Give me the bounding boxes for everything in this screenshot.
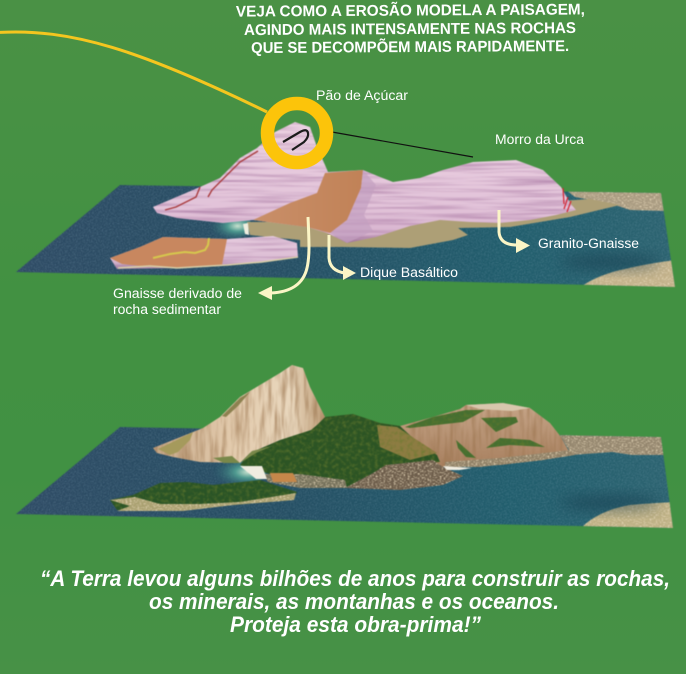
closing quote: [40, 566, 670, 637]
left shoulder vegetation: [158, 432, 193, 455]
small island: gneiss and granite: [110, 236, 298, 269]
shaded slope next to the band: [330, 170, 376, 243]
far shore, upper right: [204, 190, 680, 290]
shallow water by the beach: [218, 462, 266, 483]
small beach, Urca: [443, 466, 472, 470]
rock labels: Pão de Açúcar: [316, 88, 409, 103]
rock labels: rocha sedimentar: [113, 302, 222, 317]
yellow callout curve: [0, 32, 267, 112]
main mountain mass: [153, 122, 576, 243]
title: [236, 0, 585, 57]
rock labels: Granito-Gnaisse: [538, 236, 639, 251]
orange gneiss band: [253, 170, 363, 233]
near shore, lower right: [582, 502, 680, 530]
basalt trace yellow line: [153, 238, 209, 258]
arrow: gneiss: [258, 217, 309, 300]
arrow: basalt dike: [329, 235, 356, 280]
title: QUE SE DECOMPÕEM MAIS RAPIDAMENTE.: [251, 37, 569, 57]
title: AGINDO MAIS INTENSAMENTE NAS ROCHAS: [244, 20, 576, 39]
waterfront buildings: [263, 474, 347, 488]
town strip: [345, 460, 463, 490]
dark water shadow by the near shore: [560, 496, 660, 510]
beach strip: [243, 223, 249, 235]
small island: [110, 480, 297, 510]
shallow water near the beach: [214, 220, 250, 238]
green central hill: [240, 414, 440, 487]
water map plane: [16, 427, 673, 528]
water map plane: [16, 185, 675, 287]
closing quote: Proteja esta obra-prima!”: [230, 612, 481, 637]
realistic terrain panel: [16, 365, 680, 530]
near shore, lower right: [584, 260, 676, 288]
black contact line: [332, 132, 473, 157]
red dikes on the right end: [563, 188, 571, 212]
title: VEJA COMO A EROSÃO MODELA A PAISAGEM,: [236, 0, 585, 21]
ridge shading: [222, 392, 250, 417]
yellow ring highlight: [268, 104, 326, 162]
sports field: [270, 473, 297, 482]
rock labels: Morro da Urca: [495, 132, 584, 147]
sand lowland: [247, 199, 620, 248]
far shore, right: [560, 435, 664, 455]
arrow: granite-gneiss: [499, 210, 530, 253]
bare slope on the hill: [377, 425, 437, 460]
rock labels: [113, 88, 639, 317]
geological model panel: [0, 32, 680, 300]
island shore: [110, 493, 296, 511]
Pão de Açúcar rock: [153, 365, 325, 463]
rock labels: Dique Basáltico: [360, 265, 458, 280]
Urca summit highlight: [466, 403, 530, 411]
rock labels: Gnaisse derivado de: [113, 286, 242, 301]
base scrub patches: [213, 446, 272, 463]
summit fold symbol: [283, 130, 308, 150]
Urca vegetation patches: [405, 410, 545, 458]
Urca base town edge: [445, 450, 575, 467]
red dikes on the left ridge: [165, 151, 258, 210]
Morro da Urca rock: [395, 403, 570, 467]
beach: [240, 466, 267, 479]
dark water shadow by the near shore: [560, 255, 660, 269]
closing quote: os minerais, as montanhas e os oceanos.: [149, 589, 559, 614]
terrain layers: [16, 122, 680, 290]
